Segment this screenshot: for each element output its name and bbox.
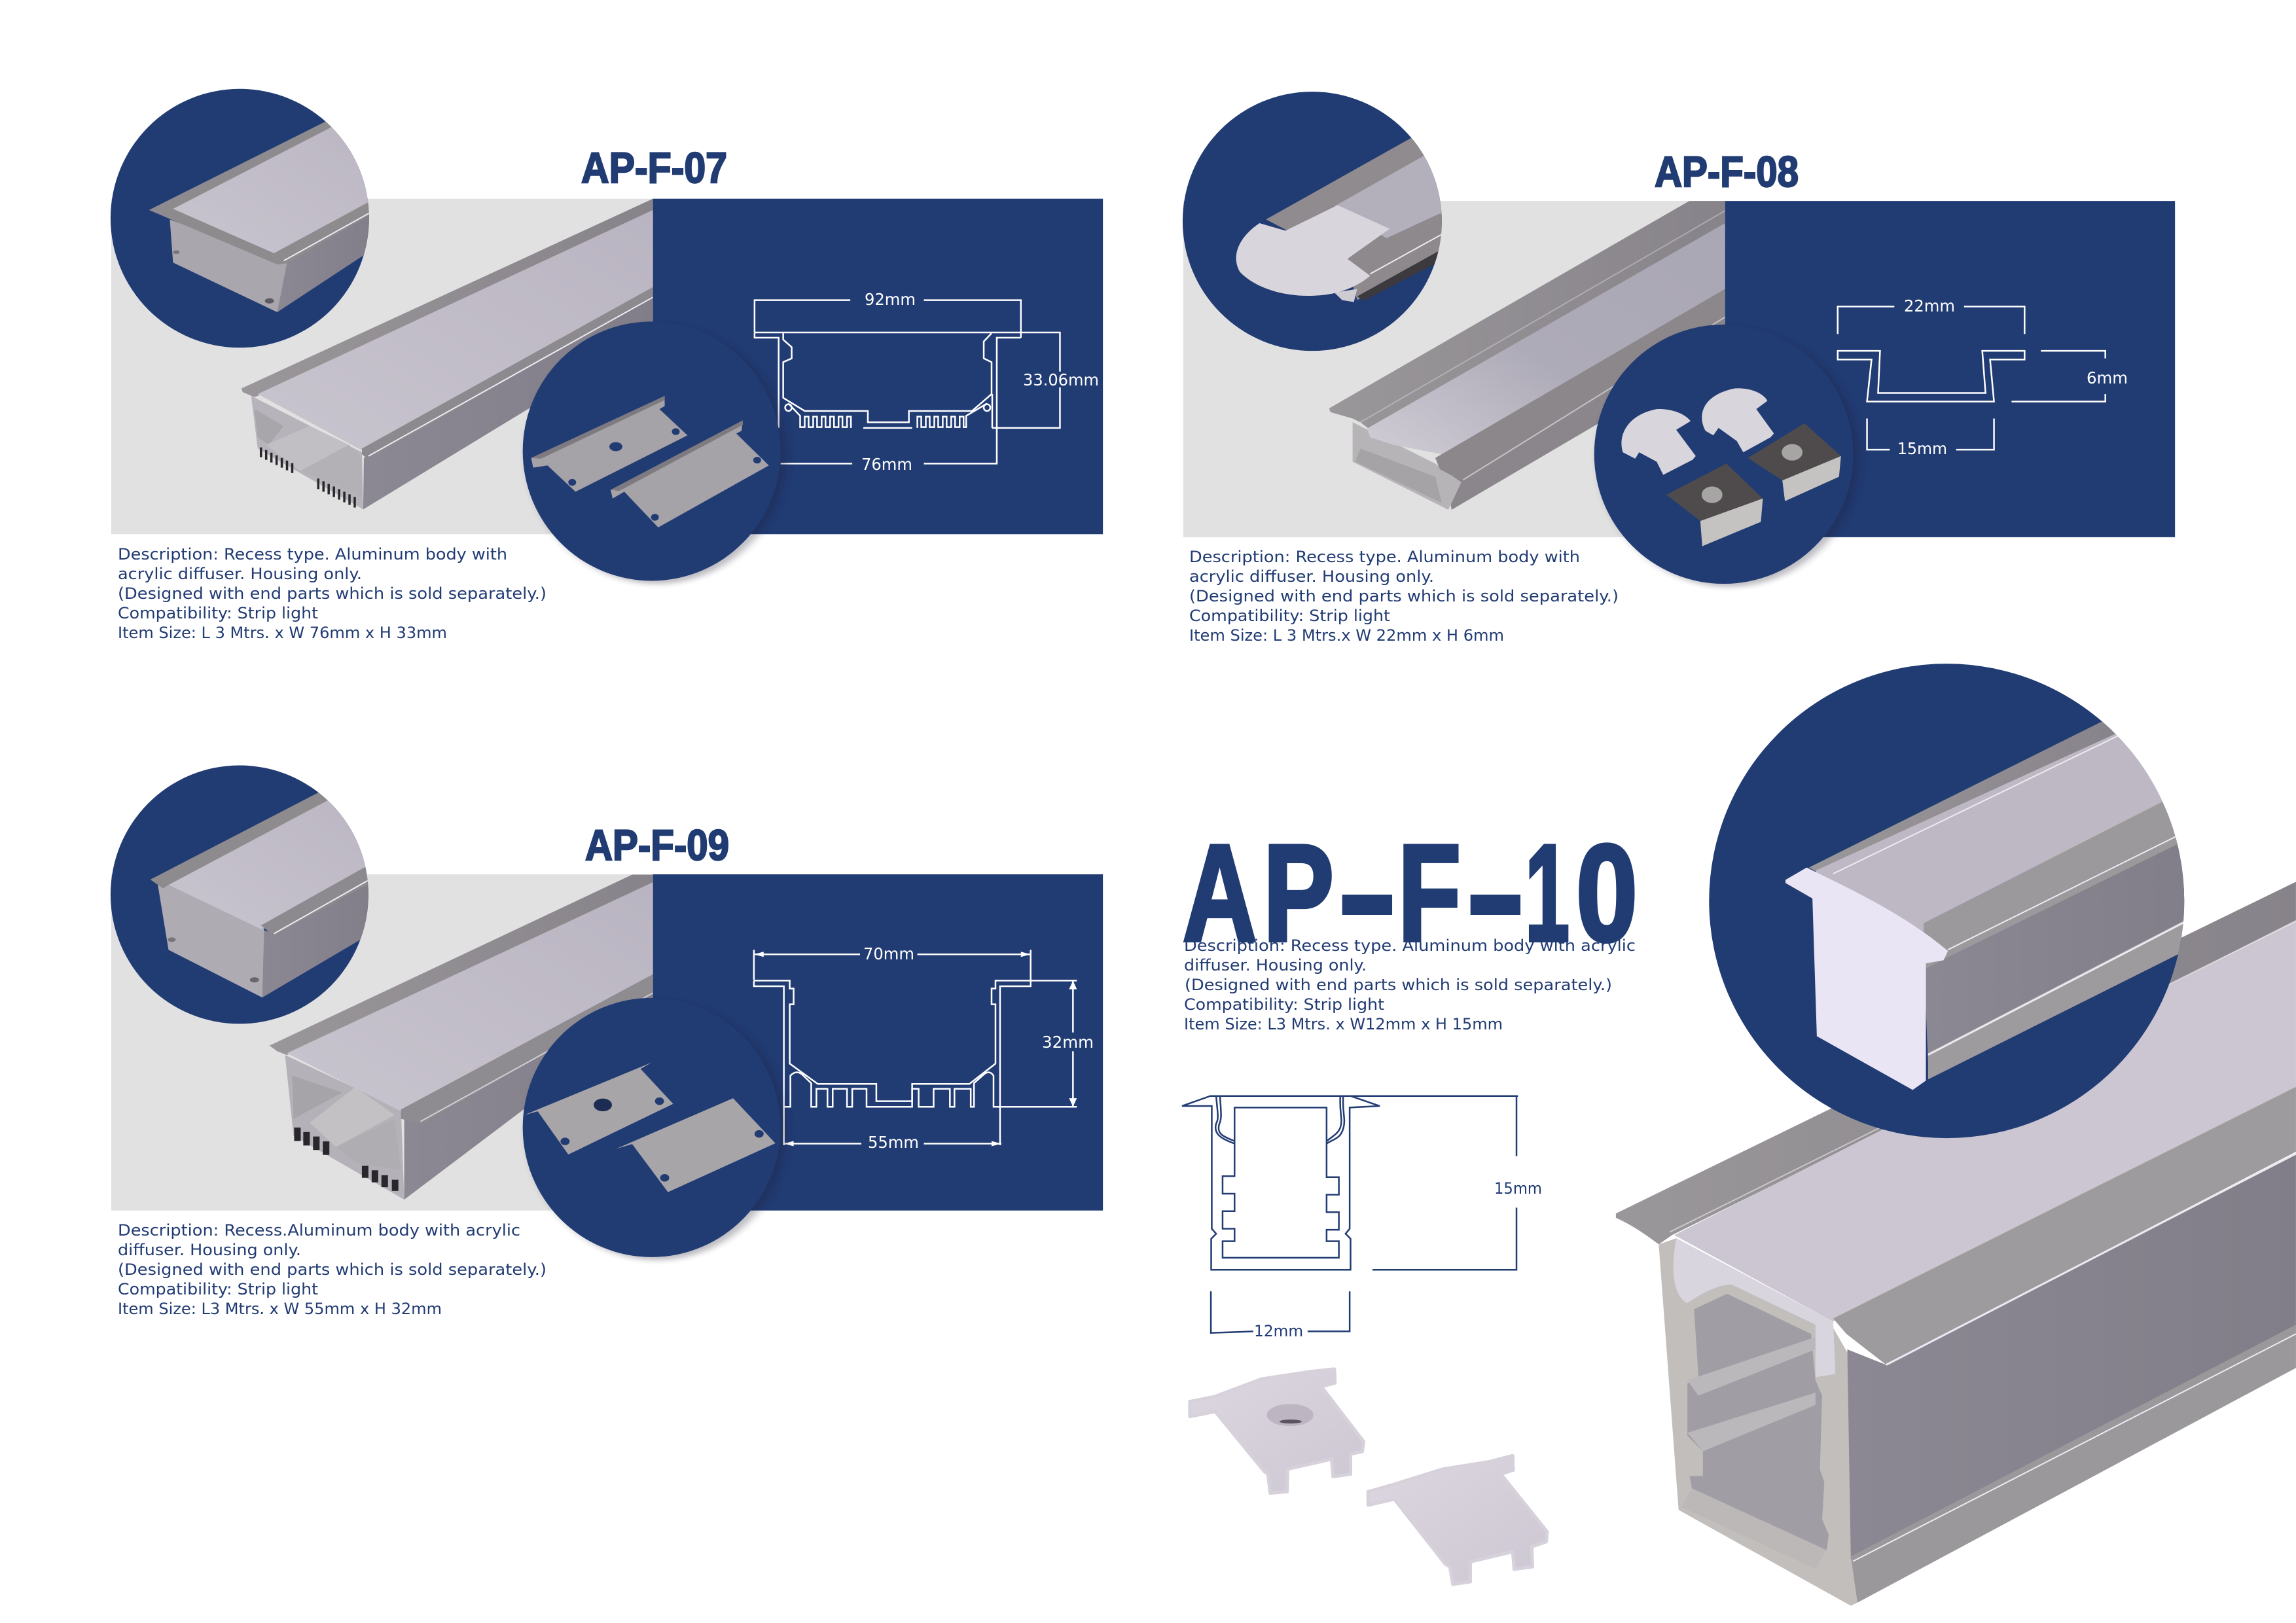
dimension label: 70mm [863,944,914,963]
circle: product close-up [1183,92,1452,351]
title: AP-F-08 [1655,147,1799,196]
product photo: long recessed profile [1329,201,1725,510]
description text: Description: Recess.Aluminum body with acrylic [118,1221,520,1240]
end plate [616,1092,776,1192]
description text: diffuser. Housing only. [118,1241,301,1259]
description text: diffuser. Housing only. [1184,956,1367,974]
panel: AP-F-07 [111,89,1103,642]
description text: Compatibility: Strip light [1189,607,1390,625]
panel: AP-F-08 [1183,92,2175,645]
circle: end plates [523,321,781,580]
circle: product close-up [111,89,398,348]
large product photo [1616,882,2296,1606]
description text: (Designed with end parts which is sold separately.) [118,1260,547,1279]
dimension label: 12mm [1254,1322,1303,1340]
description text: Description: Recess type. Aluminum body with [118,545,507,563]
description text [118,1221,547,1318]
description text: Compatibility: Strip light [118,1280,318,1298]
end cap with slot [1190,1369,1364,1493]
shadow of end-part circle [528,325,786,584]
description text: acrylic diffuser. Housing only. [118,565,362,583]
blue dimension panel [1725,201,2175,537]
product photo: long recessed profile [270,875,653,1200]
large title: A [1183,816,1257,970]
dimension label: 15mm [1897,439,1947,458]
product photo: long recessed profile [242,199,653,509]
shadow of end-part circle [1600,328,1859,587]
description text: (Designed with end parts which is sold separately.) [1189,587,1619,605]
cross-section line drawing with dimension lines [1838,306,2106,450]
dimension label: 15mm [1494,1179,1542,1198]
description text: (Designed with end parts which is sold separately.) [1185,976,1612,994]
metal bracket [1748,423,1841,501]
end plate [611,420,769,527]
circle: product close-up [111,765,385,1024]
circle: end-cap close-up [1709,664,2191,1138]
cross-section line drawing with dimension lines [754,950,1077,1147]
title: AP-F-07 [581,143,727,192]
blue dimension panel [653,199,1103,534]
dimension label: 92mm [865,290,916,309]
description text: Description: Recess type. Aluminum body with [1189,548,1580,566]
grey photo background [1183,201,1725,537]
blue dimension panel [653,874,1103,1211]
description text: Item Size: L3 Mtrs. x W12mm x H 15mm [1184,1015,1503,1033]
cross-section line drawing with dimension lines [1182,1096,1518,1333]
shadow of end-part circle [528,1001,786,1260]
dimension label: 33.06mm [1023,370,1099,389]
description text: Item Size: L3 Mtrs. x W 55mm x H 32mm [118,1300,442,1318]
grey photo background [111,874,653,1211]
dimension label: 32mm [1042,1033,1094,1052]
panel: AP-F-10 [1182,664,2296,1606]
description text: Compatibility: Strip light [1184,995,1384,1014]
dimension label: 6mm [2087,368,2128,387]
dimension label: 55mm [868,1133,919,1152]
large title: - [1466,816,1525,970]
panel: AP-F-09 [111,765,1103,1318]
metal bracket [1666,463,1763,546]
white end cap [1621,409,1696,475]
end plate with centre hole [531,396,687,491]
circle: end plates [523,998,781,1257]
description text: (Designed with end parts which is sold separately.) [118,584,547,603]
grey photo background [111,199,653,534]
description text: Description: Recess type. Aluminum body with acrylic [1184,936,1636,955]
large title: 0 [1576,816,1638,970]
white end cap [1702,388,1774,452]
end cap [1368,1455,1547,1584]
dimension label: 22mm [1904,296,1955,315]
description text [1189,548,1619,645]
large title: 1 [1525,816,1570,970]
description text: acrylic diffuser. Housing only. [1189,567,1434,586]
dimension label: 76mm [861,455,912,474]
large title: P [1263,816,1334,970]
description text: Compatibility: Strip light [118,604,318,622]
circle: end caps and brackets [1594,325,1854,584]
end plate with centre hole [524,1063,673,1154]
description text [1184,936,1636,1033]
description text [118,545,547,642]
cross-section line drawing with dimension lines [755,300,1060,463]
description text: Item Size: L 3 Mtrs. x W 76mm x H 33mm [118,624,447,642]
description text: Item Size: L 3 Mtrs.x W 22mm x H 6mm [1189,626,1504,645]
large title: F [1398,816,1461,970]
large title: - [1338,816,1397,970]
title: AP-F-09 [585,821,729,869]
